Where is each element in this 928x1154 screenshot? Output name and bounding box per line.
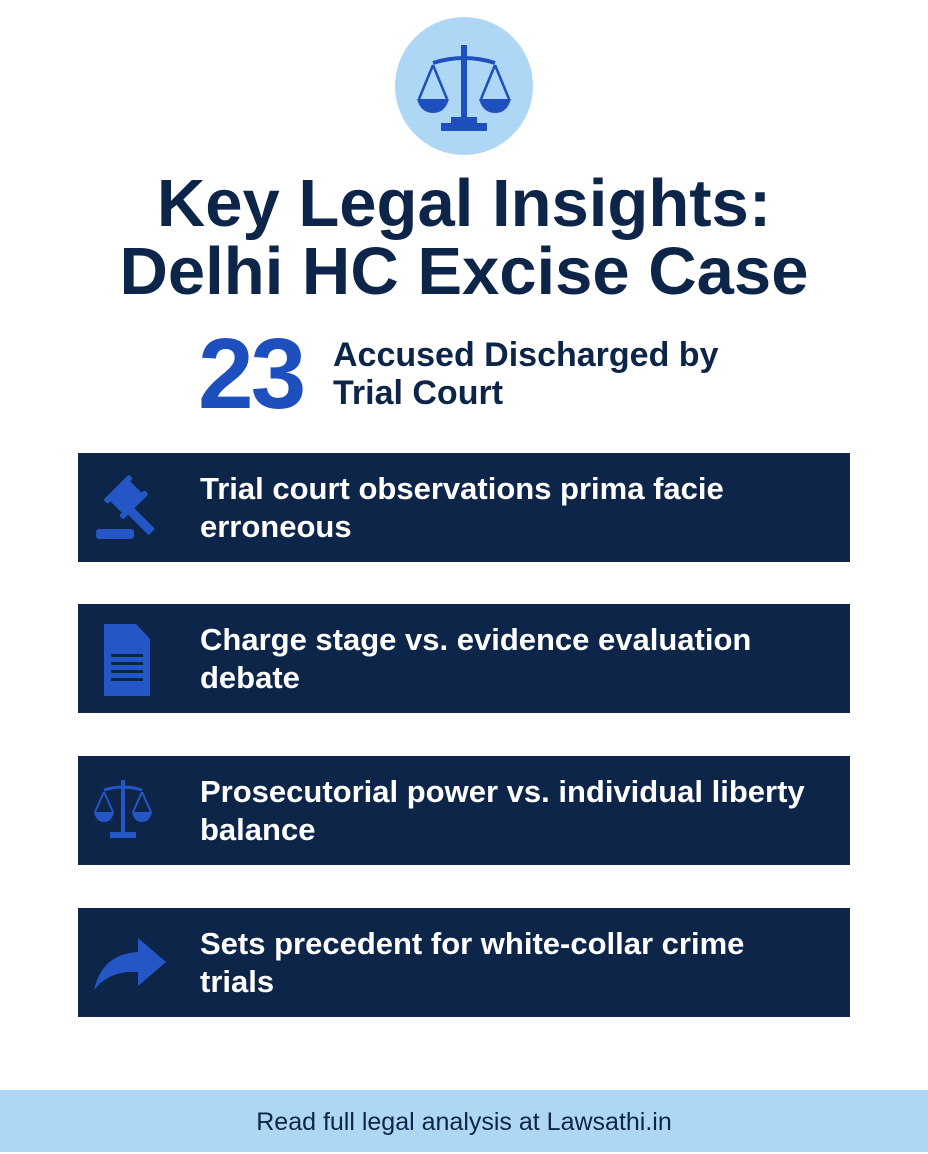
icon: document (104, 624, 150, 696)
panel: precedent (78, 908, 850, 1017)
panel: prosecutorial power (78, 756, 850, 865)
stat: 23 accused (198, 318, 718, 430)
title: Key Legal Insights: (157, 166, 771, 241)
icon: arrow (94, 938, 166, 990)
title (120, 166, 808, 309)
panel: charge stage (78, 604, 850, 713)
panel: precedent: trials (200, 964, 274, 999)
panel: observations: Trial court observations prima facie (200, 471, 724, 506)
panel: charge stage: Charge stage vs. evidence evaluation (200, 622, 751, 657)
panel: prosecutorial power: Prosecutorial power vs. individual liberty (200, 774, 805, 809)
panel: precedent: Sets precedent for white-collar crime (200, 926, 744, 961)
title: Delhi HC Excise Case (120, 234, 808, 309)
stat: 23 accused: Accused Discharged by (333, 336, 718, 374)
icon: scales (94, 780, 152, 838)
icon: gavel (96, 475, 155, 539)
panel: observations (78, 453, 850, 562)
panel: charge stage: debate (200, 660, 300, 695)
panel: observations: erroneous (200, 509, 352, 544)
footer: Read full legal analysis at Lawsathi.in (256, 1108, 672, 1136)
footer (0, 1090, 928, 1152)
icon: scales in circle (395, 17, 533, 155)
stat: 23 accused: 23 (198, 318, 303, 430)
stat: 23 accused: Trial Court (333, 374, 503, 412)
panel: prosecutorial power: balance (200, 812, 315, 847)
